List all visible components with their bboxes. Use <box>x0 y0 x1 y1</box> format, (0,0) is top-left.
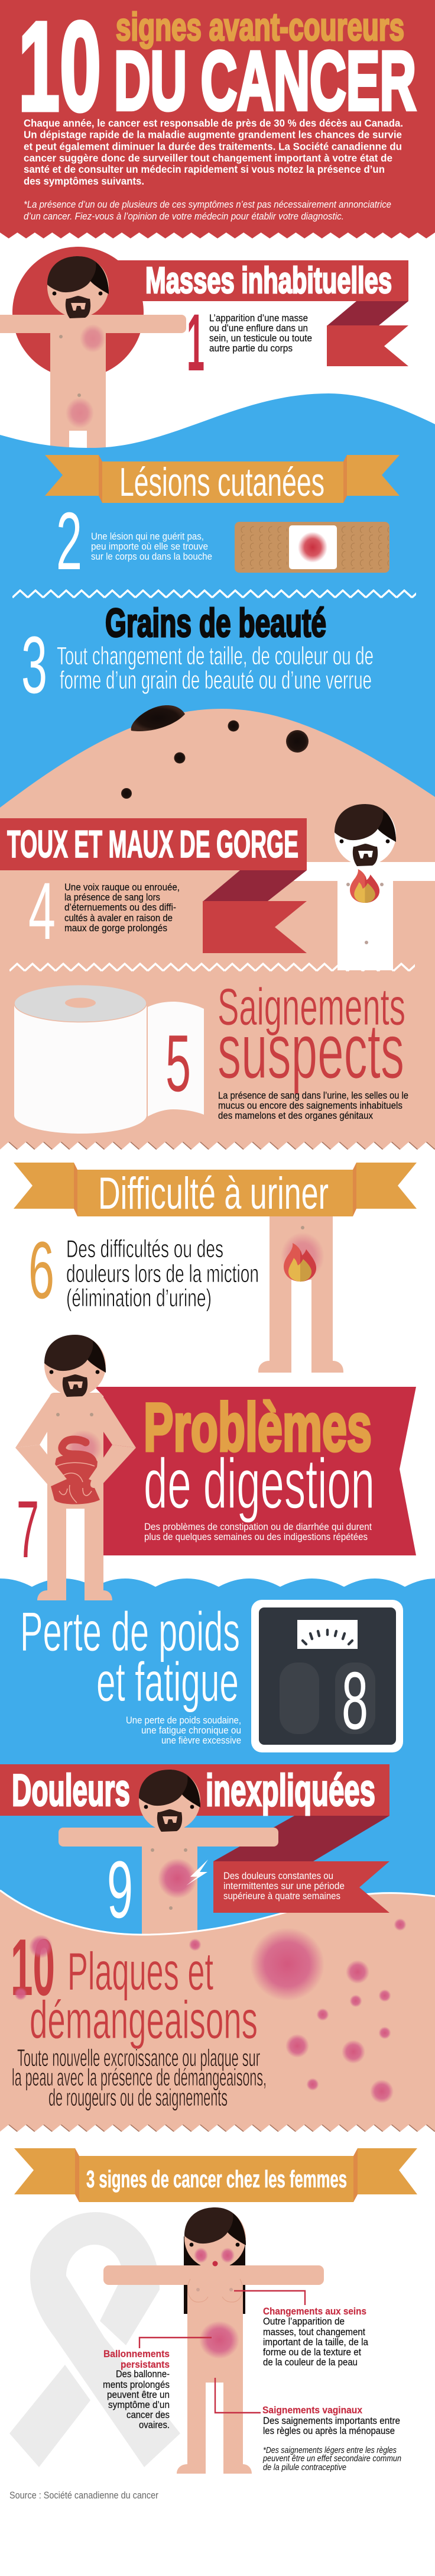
text: sign 1: autre partie du corps <box>209 343 293 354</box>
text: ballonnements persistants: Des ballonne- <box>116 2368 170 2380</box>
panel: 1 masses inhabituelles: 1 <box>187 298 204 388</box>
ribbon: masses inhabituelles <box>118 260 408 366</box>
text: ballonnements persistants: Ballonnements <box>103 2348 170 2359</box>
text: sign 7: plus de quelques semaines ou des indigestions répétées <box>144 1531 368 1542</box>
disclaimer note: d’un cancer. Fiez-vous à l’opinion de votre médecin pour établir votre diagnostic. <box>24 211 344 222</box>
panel: 3 grains de beaute <box>21 601 374 711</box>
text: sign 9: intermittentes sur une période <box>223 1880 345 1891</box>
text: saignements vaginaux <box>262 2404 400 2436</box>
text: saignements vaginaux: les règles ou après la ménopause <box>263 2425 395 2436</box>
icon: bandage <box>235 522 389 573</box>
text: sign 6: (élimination d’urine) <box>66 1284 212 1312</box>
figure: man with lumps <box>0 256 186 453</box>
text: changements aux seins: de la couleur de la peau <box>263 2357 358 2368</box>
icon: lightning <box>186 1860 208 1886</box>
panel: 2 lesions cutanees <box>45 455 400 587</box>
panel: 10 plaques et demangeaisons: 10 <box>11 1922 55 2012</box>
panel: 4 toux et maux de gorge <box>0 804 435 970</box>
note: pill: *Des saignements légers entre les règles <box>263 2446 397 2455</box>
text: sign 8: Une perte de poids soudaine, <box>126 1715 241 1726</box>
text: sign 6: Des difficultés ou des <box>66 1235 223 1263</box>
text: changements aux seins: Changements aux seins <box>263 2306 366 2317</box>
disclaimer note <box>24 199 391 222</box>
source: Source : Société canadienne du cancer <box>9 2490 158 2501</box>
panel: blue background 2 and 3 <box>0 393 435 828</box>
text: changements aux seins: Outre l’apparition de <box>263 2316 345 2327</box>
icon: awareness ribbon <box>9 2212 180 2467</box>
number 2: 2 <box>56 496 82 587</box>
text: ballonnements persistants: persistants <box>121 2359 170 2370</box>
connector: bloating <box>139 2338 212 2348</box>
panel: 9 douleurs inexpliquees <box>0 1764 435 1944</box>
text: sign 6 <box>66 1235 259 1312</box>
text: ballonnements persistants: cancer des <box>126 2409 170 2420</box>
text: sign 10: de rougeurs ou de saignements <box>48 2084 228 2111</box>
text: sign 2 <box>91 531 212 562</box>
text: changements aux seins: forme ou de la texture et <box>263 2346 361 2358</box>
text: sign 4: Une voix rauque ou enrouée, <box>64 882 180 893</box>
icon: bathroom scale <box>251 1600 403 1752</box>
intro paragraph: et peut également diminuer la durée des traitements. La Société canadienne du <box>24 141 402 153</box>
text: ballonnements persistants: symptôme d’un <box>108 2399 170 2410</box>
text: sign 5: La présence de sang dans l’urine, les selles ou le <box>218 1090 408 1101</box>
banner: digestion <box>95 1387 416 1555</box>
figure: man torso base <box>142 1834 197 1944</box>
text: saignements vaginaux: Des saignements importants entre <box>263 2415 400 2426</box>
text: ballonnements persistants <box>103 2348 170 2430</box>
figure: man with burning throat <box>294 804 435 970</box>
text: sign 7: Des problèmes de constipation ou de diarrhée qui durent <box>144 1521 372 1532</box>
text: sign 6: douleurs lors de la miction <box>66 1260 259 1287</box>
figure: woman <box>103 2207 324 2474</box>
text: sign 8 <box>126 1715 241 1746</box>
text: sign 2: sur le corps ou dans la bouche <box>91 551 212 562</box>
text: sign 4: cultés à avaler en raison de <box>64 912 173 924</box>
panel: 8 perte de poids <box>20 1600 403 1752</box>
ribbon: toux et maux de gorge <box>0 818 307 953</box>
text: sign 4 <box>64 882 180 934</box>
text: sign 8: une fatigue chronique ou <box>141 1725 241 1736</box>
heading: demangeaisons: démangeaisons <box>30 1991 258 2050</box>
text: ballonnements persistants: peuvent être un <box>107 2389 170 2400</box>
intro paragraph <box>24 117 403 187</box>
text: sign 3 <box>57 642 374 695</box>
text: changements aux seins: masses, tout changement <box>263 2326 365 2338</box>
text: sign 9 <box>223 1870 345 1902</box>
number 3: 3 <box>21 620 47 711</box>
number 8: 8 <box>342 1655 368 1747</box>
heading: perte de poids: Perte de poids <box>20 1600 240 1663</box>
text: sign 1: L’apparition d’une masse <box>209 312 308 324</box>
panel: 10 plaques et demangeaisons <box>11 1918 407 2111</box>
text: sign 2: Une lésion qui ne guérit pas, <box>91 531 204 542</box>
panel: women signs <box>9 2148 417 2474</box>
number 6: 6 <box>28 1225 54 1316</box>
number 4: 4 <box>28 866 56 957</box>
text: sign 8: une fièvre excessive <box>161 1735 241 1746</box>
text: sign 1: sein, un testicule ou toute <box>209 333 312 344</box>
text: sign 4: la présence de sang lors <box>64 892 160 903</box>
text: ballonnements persistants: ovaires. <box>139 2419 170 2430</box>
heading: douleurs: Douleurs <box>12 1765 130 1816</box>
text: sign 9: Des douleurs constantes ou <box>223 1870 333 1881</box>
heading: et fatigue: et fatigue <box>96 1651 239 1713</box>
text: sign 4: d’éternuements ou des diffi- <box>64 902 176 913</box>
text: sign 9: supérieure à quatre semaines <box>223 1890 340 1902</box>
illustration: skin patches <box>14 1918 407 2103</box>
figure: man with intestines <box>15 1335 136 1600</box>
ribbon: difficulte a uriner <box>14 1163 417 1216</box>
note: pill <box>262 2446 401 2472</box>
panel: 6 difficulte a uriner <box>14 1163 417 1373</box>
panel: 1 masses inhabituelles <box>0 247 408 453</box>
text: sign 1 <box>209 312 312 354</box>
text: sign 4: maux de gorge prolongés <box>64 922 167 934</box>
panel: 5 saignements suspects <box>14 977 408 1134</box>
heading: lesions cutanees: Lésions cutanées <box>119 460 324 505</box>
icon: intestines <box>51 1439 100 1504</box>
connector: breast <box>234 2291 305 2305</box>
intro paragraph: santé et de consulter un médecin rapidement si vous notez la présence d’un <box>24 163 385 175</box>
number 5: 5 <box>165 1018 191 1108</box>
ribbon: lesions cutanees <box>45 455 400 503</box>
intro paragraph: Un dépistage rapide de la maladie augmente grandement les chances de survie <box>24 129 402 141</box>
text: changements aux seins: important de la taille, de la <box>263 2336 368 2348</box>
icon: toilet paper roll <box>14 984 204 1134</box>
text: sign 5: des mamelons et des organes génitaux <box>218 1110 373 1121</box>
text: sign 1: ou d’une enflure dans un <box>209 322 308 334</box>
heading: difficulte a uriner: Difficulté à uriner <box>98 1168 329 1219</box>
panel: skin background 4 and 5 <box>0 709 435 1150</box>
text: sign 5 <box>218 1090 408 1121</box>
panel: 7 problemes de digestion: 7 <box>17 1484 39 1575</box>
connector: bleeding <box>215 2378 261 2413</box>
panel: 7 problemes de digestion <box>15 1335 416 1600</box>
text: sign 2: peu importe où elle se trouve <box>91 541 208 552</box>
intro paragraph: Chaque année, le cancer est responsable de près de 30 % des décès au Canada. <box>24 117 403 129</box>
text: sign 5: mucus ou encore des saignements inhabituels <box>218 1100 402 1111</box>
illustration: moles <box>121 705 309 799</box>
text: sign 7 <box>144 1521 372 1542</box>
note: pill: peuvent être un effet secondaire commun <box>262 2454 401 2464</box>
panel: blue background 8 and 9 <box>0 1578 435 2132</box>
text: changements aux seins <box>263 2306 368 2368</box>
text: saignements vaginaux: Saignements vaginaux <box>262 2404 362 2416</box>
text: ballonnements persistants: ments prolongés <box>103 2379 170 2390</box>
ribbon: women heading <box>14 2148 417 2202</box>
text: sign 10 <box>12 2044 267 2111</box>
head: man 9 <box>139 1770 200 1832</box>
intro paragraph: cancer suggère donc de surveiller tout changement important à votre état de <box>24 152 392 164</box>
figure: man arms and chest <box>59 1828 278 1899</box>
note: pill: de la pilule contraceptive <box>263 2463 346 2472</box>
heading: plaques et: Plaques et <box>67 1942 213 2002</box>
figure: lower body with flame <box>258 1213 343 1373</box>
number 9: 9 <box>107 1845 133 1935</box>
heading: grains de beaute: Grains de beauté <box>105 601 326 645</box>
disclaimer note: *La présence d’un ou de plusieurs de ces symptômes n’est pas nécessairement annonciatrice <box>24 199 391 210</box>
panel: header <box>0 0 435 238</box>
intro paragraph: des symptômes suivants. <box>24 175 144 187</box>
title: 10: 10 <box>18 0 101 137</box>
ribbon: douleurs inexpliquees <box>0 1764 389 1913</box>
